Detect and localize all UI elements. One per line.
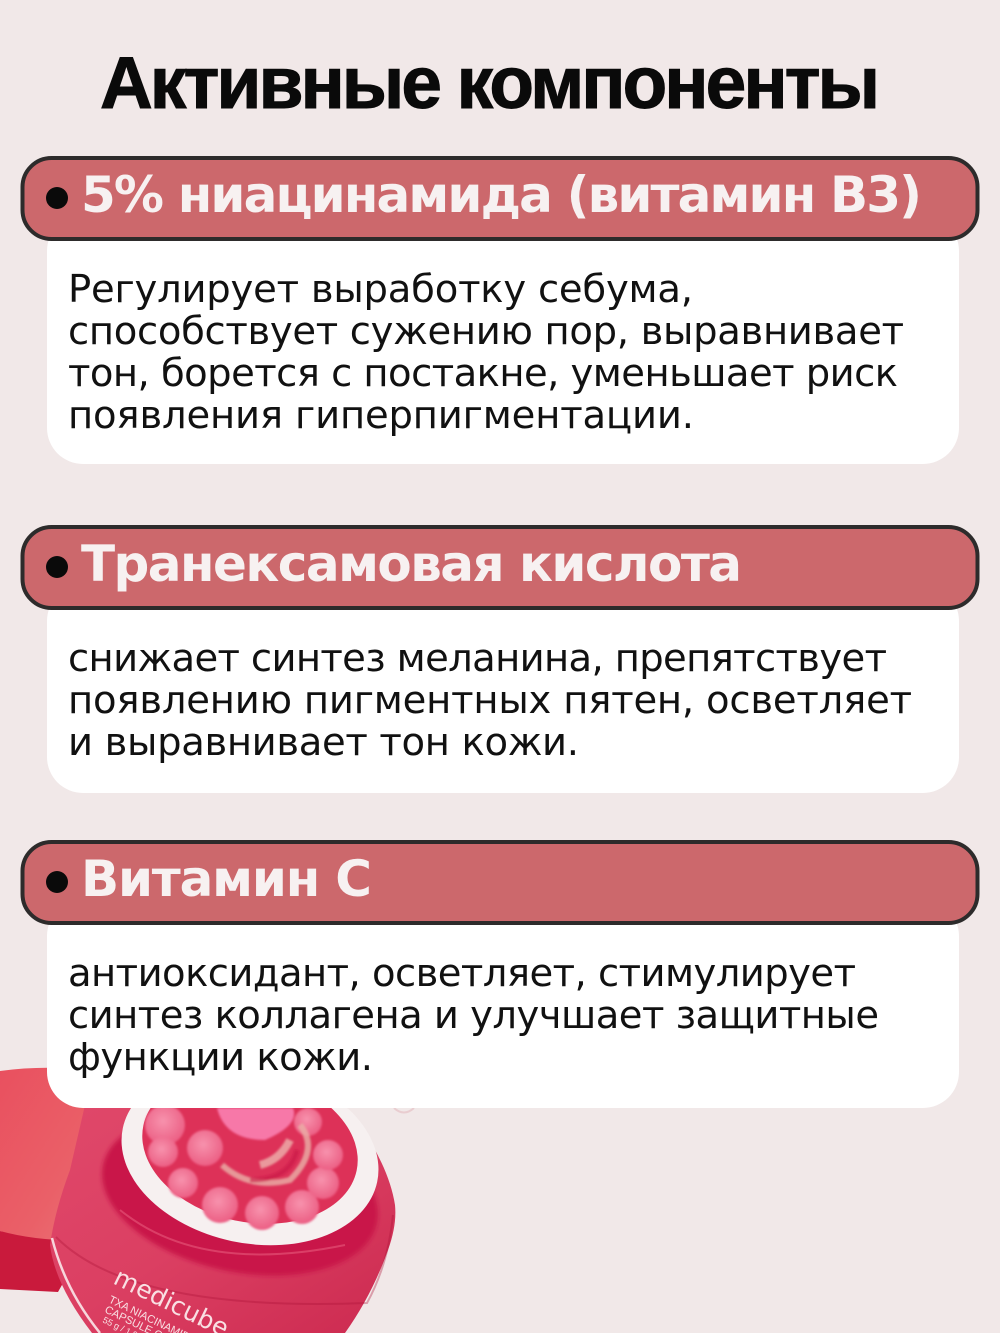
card body: синтез коллагена и улучшает защитные [68,993,879,1038]
card body [47,215,959,464]
jar rim and contents [105,1042,395,1268]
heading pill: Витамин C [81,850,372,908]
panel: vitamin C [22,842,978,1108]
heading pill [22,158,978,239]
card body: появлению пигментных пятен, осветляет [68,678,912,723]
heading pill: 5% ниацинамида (витамин B3) [81,166,922,224]
heading pill: Транексамовая кислота [81,535,742,593]
droplet [394,1108,414,1112]
card body: антиоксидант, осветляет, стимулирует [68,951,856,996]
card body: функции кожи. [68,1035,373,1080]
card body: и выравнивает тон кожи. [68,720,579,765]
heading pill [22,527,978,608]
panel: niacinamide [22,158,978,464]
card body: Регулирует выработку себума, [68,267,693,312]
product photo: medicube jar [0,1042,414,1333]
panel: tranexamic acid [22,527,978,793]
card body: снижает синтез меланина, препятствует [68,636,887,681]
title: Активные компоненты [100,43,880,124]
card body: появления гиперпигментации. [68,393,694,438]
card body [47,585,959,793]
jar body [50,1089,395,1333]
card body [47,900,959,1108]
card body: способствует сужению пор, выравнивает [68,309,904,354]
jar lid [0,1068,110,1292]
heading pill [22,842,978,923]
card body: тон, борется с постакне, уменьшает риск [68,351,898,396]
